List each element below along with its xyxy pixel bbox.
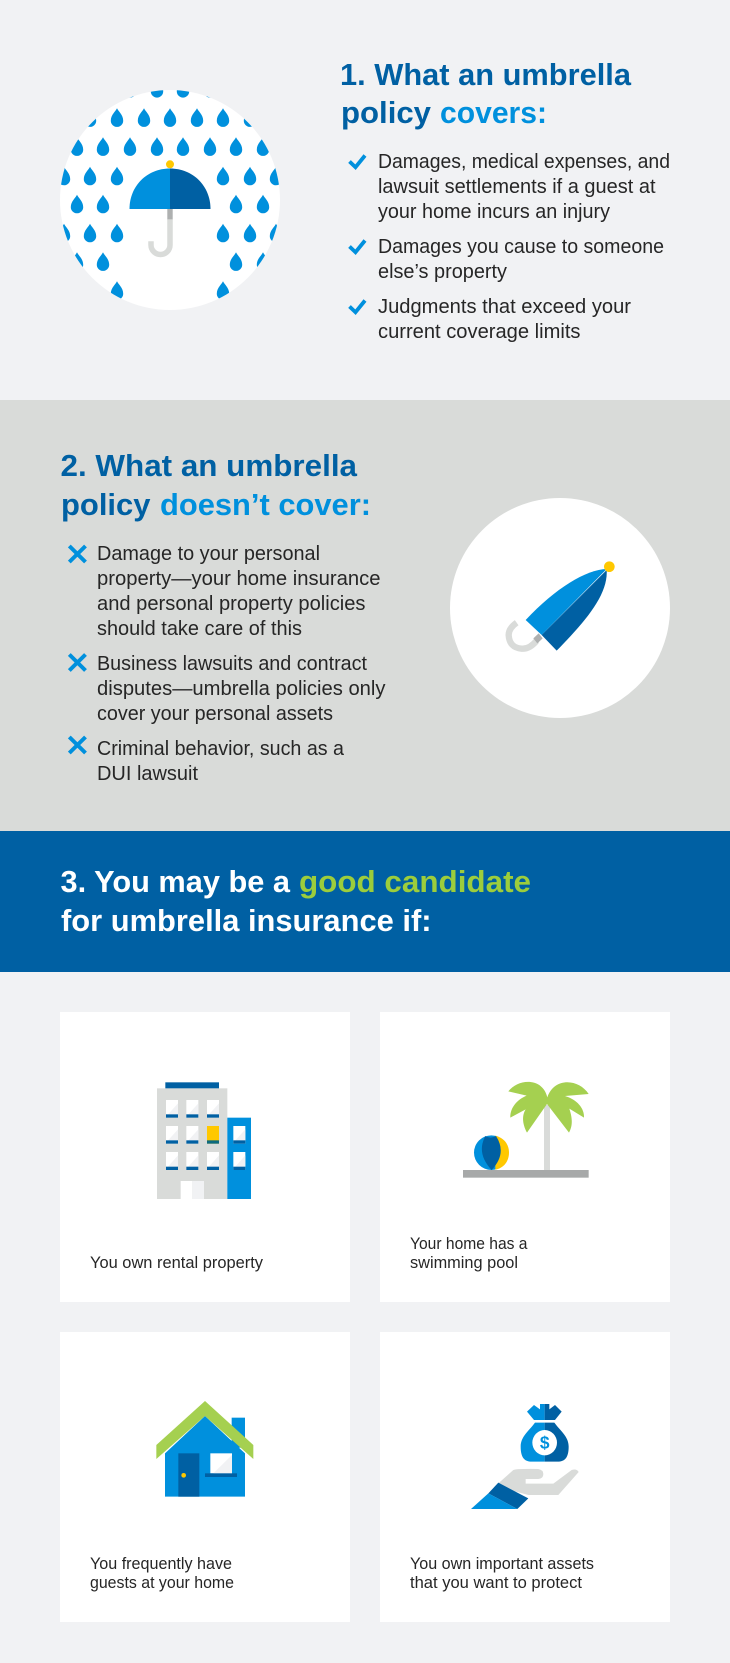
text: frequent guests: [90, 1554, 234, 1592]
heading: section 2: policy: [61, 487, 151, 522]
text: excluded item 3: DUI lawsuit: [97, 763, 198, 785]
text: excluded item 1: should take care of this: [97, 618, 302, 640]
heading: section 1: [340, 57, 632, 130]
icon: closed umbrella: [450, 498, 670, 718]
heading: section 1: covers:: [440, 95, 547, 130]
card: frequent guests: [60, 1332, 350, 1622]
text: covered item 3: current coverage limits: [378, 321, 580, 343]
icon: palm tree and beach ball: [463, 1082, 589, 1178]
text: excluded item 1: [97, 543, 380, 640]
icon: cross 3: [69, 737, 86, 753]
text: covered item 2: Damages you cause to someone: [378, 236, 664, 258]
text: excluded item 2: [97, 653, 386, 725]
text: excluded item 1: Damage to your personal: [97, 543, 320, 565]
list: not covered items: [69, 543, 386, 785]
banner: good candidate heading: 3. You may be a: [60, 864, 291, 899]
icon: check mark 1: [350, 156, 365, 167]
icon: check mark 2: [350, 240, 365, 252]
text: excluded item 3: Criminal behavior, such as a: [97, 738, 345, 760]
card: important assets: [380, 1332, 670, 1622]
text: covered item 1: [378, 151, 670, 223]
icon: house: [156, 1401, 253, 1497]
list: covered items: [350, 151, 670, 343]
text: frequent guests: You frequently have: [90, 1554, 232, 1573]
banner: good candidate heading: for umbrella insurance if:: [61, 903, 432, 938]
text: important assets: that you want to protect: [410, 1573, 582, 1592]
heading: section 2: 2. What an umbrella: [60, 448, 358, 483]
heading: section 2: doesn’t cover:: [160, 487, 371, 522]
heading: section 2: [60, 448, 371, 522]
text: covered item 1: your home incurs an injury: [378, 201, 610, 223]
banner: good candidate heading: good candidate: [299, 864, 531, 899]
text: covered item 1: lawsuit settlements if a guest at: [378, 176, 656, 198]
icon: apartment building: [157, 1082, 251, 1199]
text: covered item 3: Judgments that exceed your: [378, 296, 631, 318]
heading: section 1: policy: [341, 95, 432, 130]
text: covered item 3: [378, 296, 631, 343]
text: swimming pool: [410, 1234, 528, 1272]
panel: what an umbrella policy covers: [60, 63, 669, 342]
text: rental property: You own rental property: [90, 1253, 263, 1272]
heading: section 1: 1. What an umbrella: [340, 57, 632, 92]
panel: candidate cards: [0, 972, 730, 1663]
card: rental property: [60, 1012, 350, 1302]
card: swimming pool: [380, 1012, 670, 1302]
text: covered item 2: [378, 236, 664, 283]
text: important assets: [410, 1554, 594, 1592]
icon: hand holding money bag: [471, 1404, 579, 1509]
icon: cross 1: [69, 546, 86, 562]
text: covered item 1: Damages, medical expenses, and: [378, 151, 670, 173]
text: excluded item 1: and personal property policies: [97, 593, 366, 615]
text: excluded item 3: [97, 738, 345, 785]
icon: cross 2: [69, 654, 86, 670]
text: excluded item 2: Business lawsuits and contract: [97, 653, 367, 675]
icon: hand holding money bag: $: [540, 1433, 550, 1453]
text: frequent guests: guests at your home: [90, 1573, 234, 1592]
text: swimming pool: swimming pool: [410, 1253, 518, 1272]
text: excluded item 1: property—your home insurance: [97, 568, 380, 590]
text: important assets: You own important assets: [410, 1554, 594, 1573]
icon: check mark 3: [350, 300, 365, 312]
icon: umbrella in rain: [58, 79, 282, 310]
text: excluded item 2: disputes—umbrella policies only: [97, 678, 386, 700]
text: swimming pool: Your home has a: [410, 1234, 528, 1253]
panel: what an umbrella policy doesn't cover: [0, 400, 730, 831]
banner: good candidate heading: [0, 831, 730, 972]
text: covered item 2: else’s property: [378, 261, 507, 283]
text: excluded item 2: cover your personal assets: [97, 703, 333, 725]
